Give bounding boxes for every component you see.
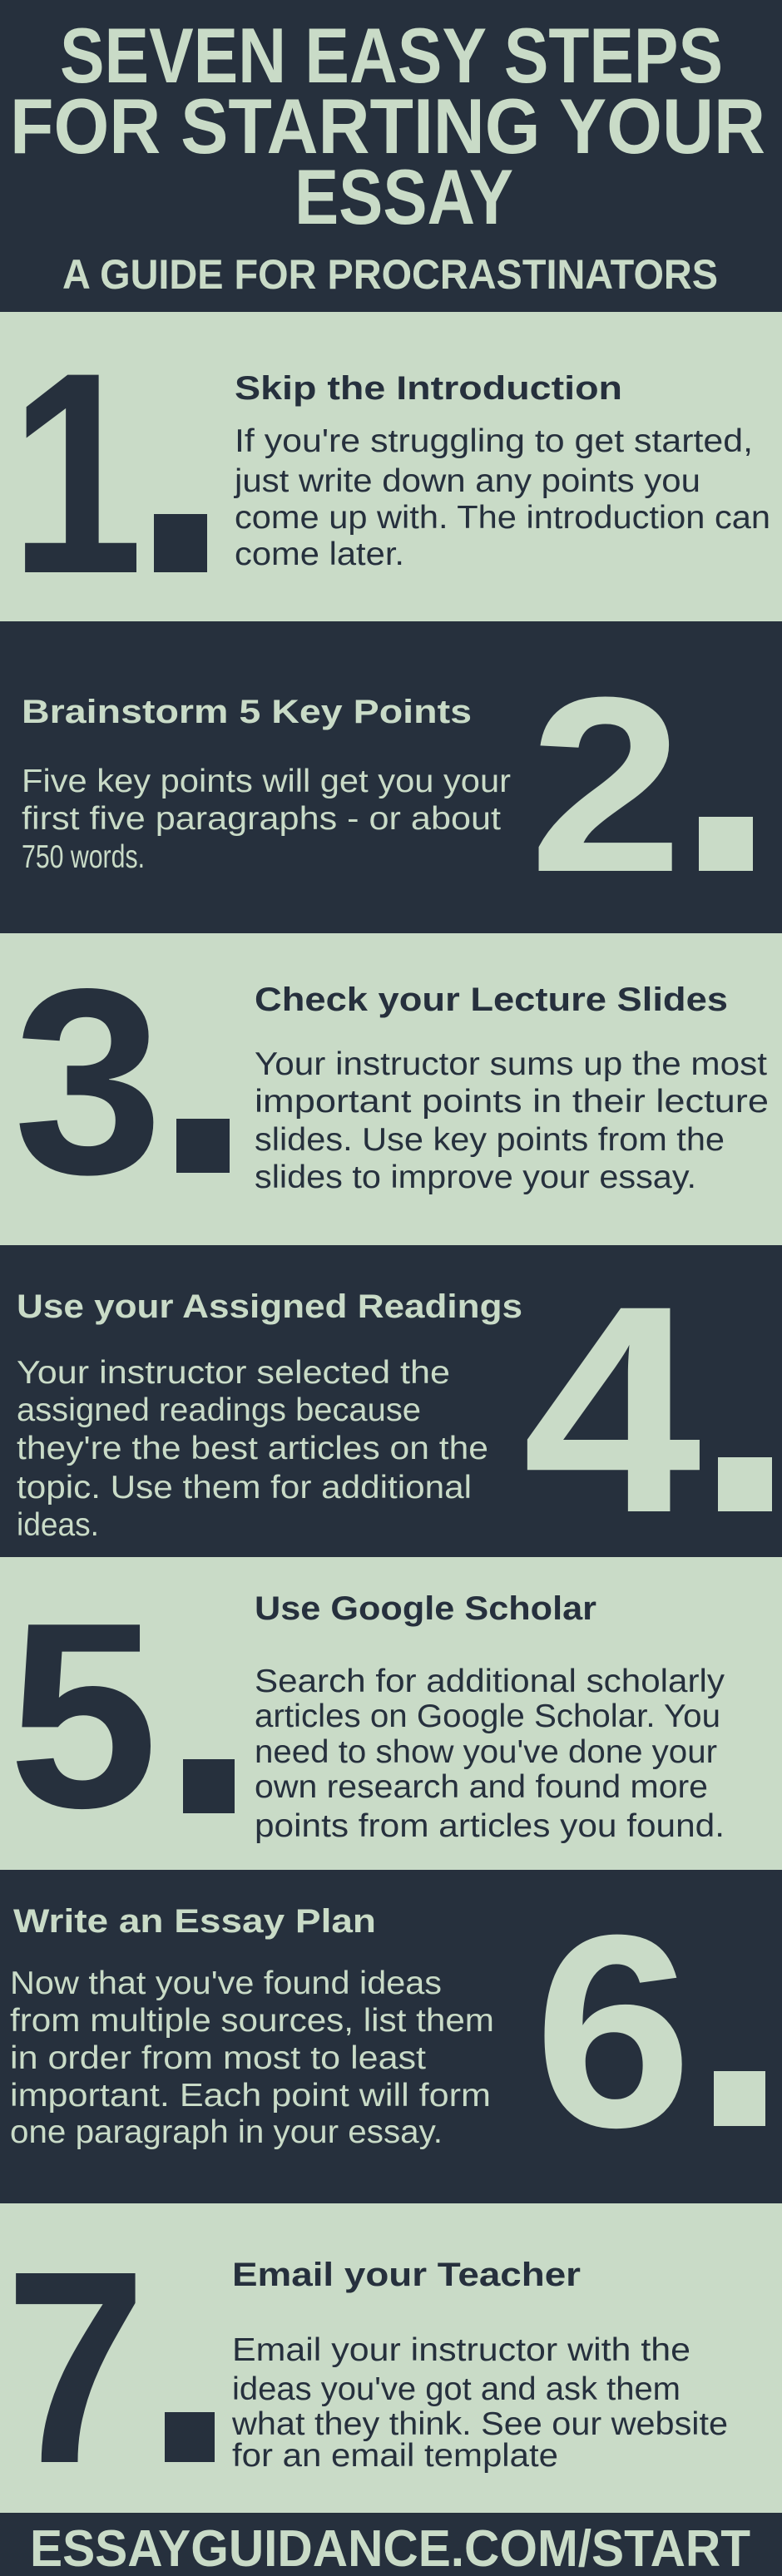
- body text 1: come later.: [235, 536, 404, 572]
- body text 5: own research and found more: [255, 1769, 708, 1805]
- body text 3: Your instructor sums up the most: [255, 1046, 767, 1082]
- body text 1: come up with. The introduction can: [235, 500, 770, 536]
- body text 4: Your instructor selected the: [17, 1355, 450, 1391]
- body text 5: Search for additional scholarly: [255, 1664, 725, 1699]
- panel: step 1: [0, 312, 782, 634]
- body text 5: articles on Google Scholar. You: [255, 1698, 720, 1734]
- body text 2: [22, 764, 511, 875]
- body text 4: they're the best articles on the: [17, 1431, 488, 1466]
- body text 7: what they think. See our website: [231, 2406, 728, 2442]
- big number 2: 2: [529, 645, 683, 924]
- panel: step 7: [0, 2203, 782, 2520]
- body text 6: Now that you've found ideas: [10, 1965, 442, 2001]
- body text 4: assigned readings because: [17, 1392, 421, 1428]
- big number 5: 5: [8, 1568, 158, 1863]
- body text 3: slides to improve your essay.: [255, 1159, 696, 1195]
- subtitle: A GUIDE FOR PROCRASTINATORS: [62, 251, 718, 298]
- big number 4: [522, 1245, 772, 1575]
- body text 1: If you're struggling to get started,: [235, 423, 753, 459]
- footer: [0, 2513, 782, 2576]
- big number 7: 7: [5, 2213, 146, 2520]
- big number 5: [8, 1568, 235, 1863]
- body text 7: Email your instructor with the: [232, 2332, 690, 2368]
- body text 4: topic. Use them for additional: [17, 1470, 472, 1506]
- body text 7: for an email template: [232, 2438, 558, 2474]
- heading: Use your Assigned Readings: Use your Assigned Readings: [17, 1288, 522, 1325]
- panel: step 2: [0, 621, 782, 933]
- heading: Email your Teacher: Email your Teacher: [232, 2257, 581, 2293]
- body text 1: just write down any points you: [234, 463, 700, 499]
- big number 1: 1: [10, 314, 143, 634]
- body text 2: Five key points will get you your: [22, 764, 511, 799]
- body text 7: ideas you've got and ask them: [232, 2371, 681, 2407]
- body text 6: important. Each point will form: [10, 2078, 491, 2114]
- big number 6: 6: [534, 1877, 692, 2184]
- body text 2: 750 words.: [22, 839, 145, 875]
- body text 7: [231, 2332, 728, 2474]
- heading: Skip the Introduction: Skip the Introduction: [235, 370, 622, 407]
- heading: Write an Essay Plan: Write an Essay Plan: [13, 1903, 376, 1940]
- title: [10, 12, 765, 240]
- big number 2: [529, 645, 753, 924]
- big number 4: 4: [522, 1245, 703, 1575]
- body text 6: one paragraph in your essay.: [10, 2114, 443, 2150]
- body text 6: in order from most to least: [10, 2040, 426, 2076]
- body text 6: [10, 1965, 494, 2150]
- panel: step 6: [0, 1870, 782, 2203]
- heading: Brainstorm 5 Key Points: Brainstorm 5 Key Points: [22, 694, 472, 730]
- body text 2: first five paragraphs - or about: [22, 801, 501, 837]
- panel: step 3: [0, 933, 782, 1245]
- body text 3: [255, 1046, 769, 1195]
- body text 1: [234, 423, 770, 572]
- body text 4: ideas.: [17, 1507, 99, 1543]
- panel: step 5: [0, 1557, 782, 1870]
- heading: Use Google Scholar: Use Google Scholar: [255, 1590, 596, 1627]
- heading: Check your Lecture Slides: Check your Lecture Slides: [255, 981, 728, 1018]
- body text 5: need to show you've done your: [255, 1734, 717, 1770]
- body text 5: [255, 1664, 725, 1844]
- body text 3: important points in their lecture: [255, 1084, 769, 1120]
- big number 3: [13, 934, 230, 1229]
- header panel: [0, 0, 782, 312]
- body text 5: points from articles you found.: [255, 1808, 725, 1844]
- big number 6: [534, 1877, 765, 2184]
- body text 3: slides. Use key points from the: [255, 1122, 725, 1158]
- big number 3: 3: [13, 934, 163, 1229]
- body text 4: [17, 1355, 488, 1543]
- body text 6: from multiple sources, list them: [10, 2003, 494, 2039]
- title: ESSAY: [294, 153, 513, 240]
- panel: step 4: [0, 1245, 782, 1575]
